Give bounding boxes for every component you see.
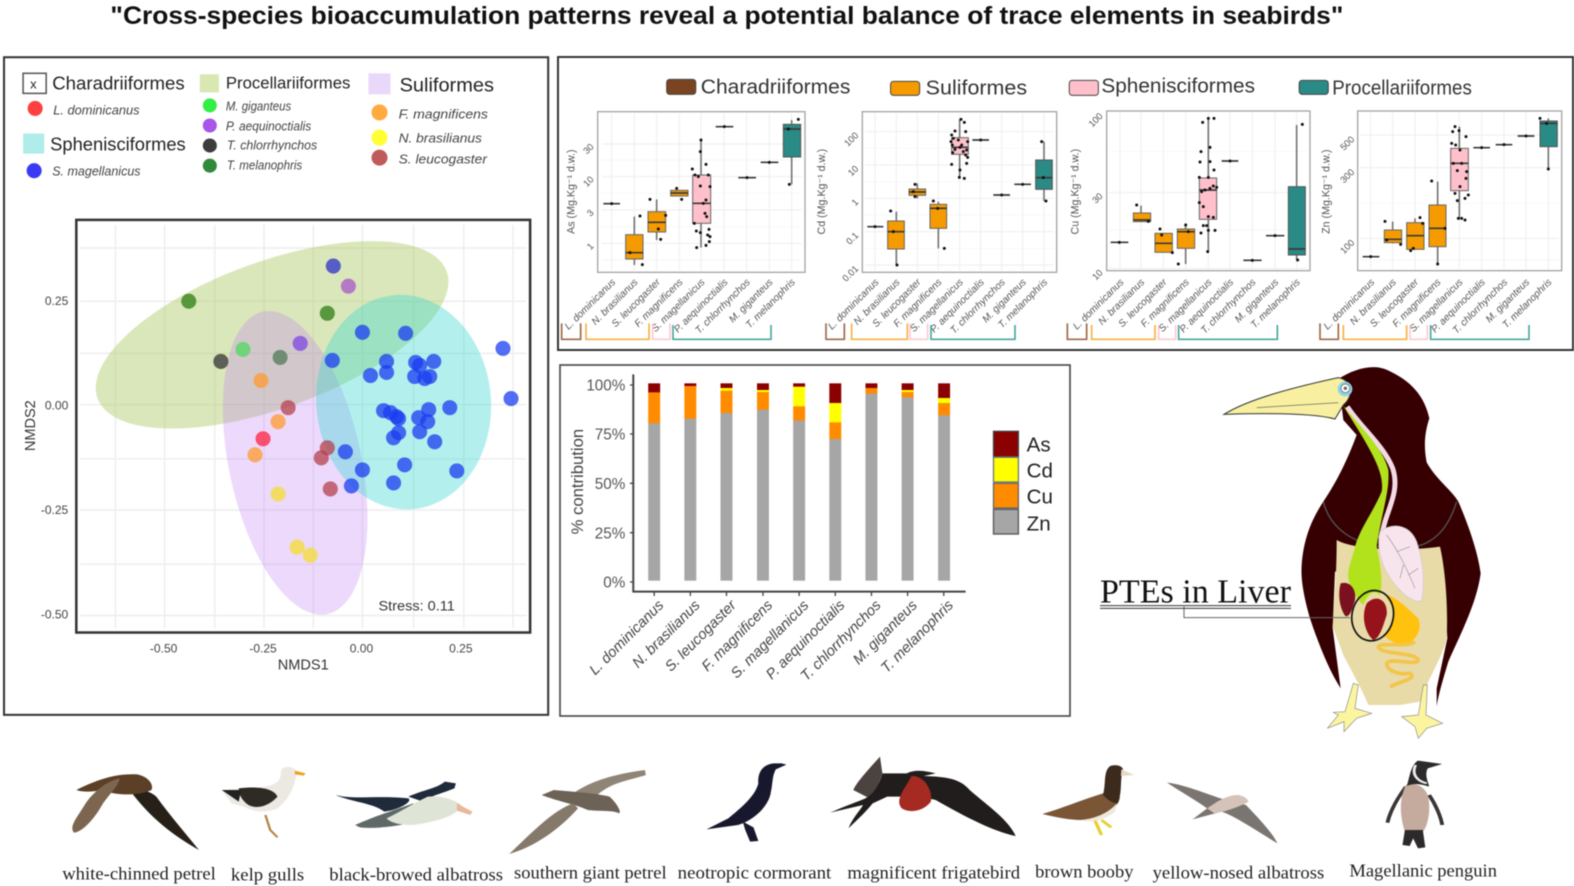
chart: As boxplot: P. aequinoctialis bbox=[672, 277, 730, 335]
bird: white-chinned petrel bbox=[72, 774, 199, 850]
stress label: Stress: 0.11 bbox=[379, 597, 455, 613]
chart: Cu boxplot: L. dominicanus bbox=[1071, 277, 1126, 332]
title: "Cross-species bioaccumulation patterns reveal a potential balance of trace elements in seabirds" bbox=[110, 2, 1343, 30]
chart: Cd boxplot: 10 bbox=[846, 164, 860, 178]
chart: Zn boxplot: S. magellanicus bbox=[1408, 277, 1465, 335]
legend: taxonomic orders and species: M. giganteus bbox=[226, 99, 292, 113]
legend: taxonomic orders and species: Charadriiformes bbox=[52, 73, 185, 93]
stacked bars % contribution: S. leucogaster bbox=[662, 597, 740, 675]
chart: Cd boxplot: P. aequinoctialis bbox=[929, 277, 987, 335]
x axis ticks: 0.00 bbox=[350, 642, 373, 656]
legend: elements: Cd bbox=[1027, 460, 1053, 483]
chart: Cd boxplot: 1 bbox=[850, 197, 860, 208]
chart: Zn boxplot: N. brasilianus bbox=[1348, 277, 1399, 328]
chart: Cu boxplot: N. brasilianus bbox=[1097, 277, 1147, 328]
panel: stacked bar chart bbox=[560, 365, 1070, 716]
chart: As boxplot: N. brasilianus bbox=[590, 277, 640, 328]
gizzard bbox=[1383, 594, 1420, 645]
x axis ticks: -0.50 bbox=[150, 642, 178, 656]
chart: Cu boxplot: F. magnificens bbox=[1139, 277, 1192, 330]
chart: Cu boxplot: Cu (Mg.Kg⁻¹ d.w.) bbox=[1069, 149, 1081, 234]
x axis title: NMDS1 bbox=[278, 658, 329, 674]
y axis ticks bbox=[41, 294, 69, 621]
stacked bars % contribution: % contribution bbox=[568, 429, 587, 534]
chart: Cd boxplot: L. dominicanus bbox=[826, 277, 881, 332]
chart: Cu boxplot: 10 bbox=[1090, 268, 1105, 282]
chart: As boxplot: 10 bbox=[581, 174, 596, 189]
y axis title: NMDS2 bbox=[23, 400, 39, 451]
legend: taxonomic orders and species: P. aequinoctialis bbox=[226, 120, 312, 134]
chart: As boxplot: 30 bbox=[581, 142, 596, 156]
chart: As boxplot: T. chlorrhynchos bbox=[693, 277, 753, 336]
chart: Zn boxplot: L. dominicanus bbox=[1322, 277, 1377, 332]
trachea bbox=[1347, 407, 1395, 538]
stacked bars % contribution: 75% bbox=[595, 427, 626, 444]
feet bbox=[1327, 683, 1443, 738]
chart: Zn boxplot: M. giganteus bbox=[1484, 277, 1532, 325]
legend: taxonomic orders and species: N. brasilianus bbox=[399, 132, 483, 146]
chart: As boxplot: S. magellanicus bbox=[650, 277, 707, 335]
chart: Cu boxplot: T. melanophris bbox=[1249, 277, 1303, 331]
y axis ticks: 0.25 bbox=[45, 294, 69, 308]
bird captions: southern giant petrel bbox=[514, 862, 667, 882]
chart: As boxplot: L. dominicanus bbox=[563, 277, 618, 332]
stacked bars % contribution: P. aequinoctialis bbox=[763, 597, 849, 683]
chart: As boxplot: S. leucogaster bbox=[610, 277, 663, 330]
legend: taxonomic orders and species: Sphenisciformes bbox=[50, 135, 186, 155]
stacked bars % contribution: N. brasilianus bbox=[630, 597, 704, 672]
stacked bars % contribution: M. giganteus bbox=[850, 597, 921, 668]
chart: As boxplot: As (Mg.Kg⁻¹ d.w.) bbox=[565, 149, 577, 234]
label: PTEs in Liver: PTEs in Liver bbox=[1100, 574, 1291, 611]
legend: taxonomic orders and species bbox=[23, 73, 494, 179]
stacked bars % contribution: S. magellanicus bbox=[728, 597, 813, 682]
intestine bbox=[1378, 642, 1418, 687]
bird: brown booby bbox=[1042, 765, 1134, 835]
chart: As boxplot: F. magnificens bbox=[633, 277, 685, 330]
stacked bars % contribution: F. magnificens bbox=[699, 597, 777, 675]
y axis ticks: -0.25 bbox=[41, 503, 69, 517]
chart: Zn boxplot: 500 bbox=[1338, 134, 1356, 152]
bird: southern giant petrel bbox=[509, 770, 646, 854]
stacked bars % contribution: 25% bbox=[595, 525, 626, 542]
chart: Cd boxplot: T. melanophris bbox=[996, 277, 1050, 331]
bird captions: kelp gulls bbox=[231, 865, 304, 885]
chart: As boxplot: 1 bbox=[585, 241, 596, 252]
chart: Zn boxplot: F. magnificens bbox=[1391, 277, 1443, 330]
chart: Cd boxplot: M. giganteus bbox=[981, 277, 1029, 325]
bird captions: magnificent frigatebird bbox=[847, 862, 1020, 882]
legend: taxonomic orders and species: F. magnificens bbox=[399, 107, 489, 121]
bird images row, right bbox=[830, 757, 1442, 848]
chart: Zn boxplot: S. leucogaster bbox=[1368, 277, 1422, 330]
chart: Cu boxplot: P. aequinoctialis bbox=[1178, 277, 1236, 335]
chart: Zn boxplot: T. melanophris bbox=[1501, 277, 1554, 331]
data points bbox=[181, 259, 519, 563]
stacked bars % contribution: T. melanophris bbox=[878, 597, 957, 676]
boxplot legend: Suliformes bbox=[926, 77, 1027, 99]
chart: Zn boxplot: 100 bbox=[1338, 238, 1356, 256]
stacked bars % contribution: T. chlorrhynchos bbox=[798, 597, 885, 685]
chart: Zn boxplot bbox=[1320, 111, 1562, 339]
chart: Cd boxplot: 0.01 bbox=[841, 264, 860, 284]
stacked bars % contribution: 50% bbox=[595, 476, 626, 493]
bird: black-browed albatross bbox=[336, 782, 472, 828]
chart: Cd boxplot: S. magellanicus bbox=[908, 277, 966, 335]
chart: Cu boxplot: 30 bbox=[1090, 191, 1105, 205]
chart: Cu boxplot: S. magellanicus bbox=[1157, 277, 1214, 335]
bird captions: neotropic cormorant bbox=[678, 862, 831, 882]
body silhouette bbox=[1301, 367, 1481, 707]
chart: Cd boxplot: S. leucogaster bbox=[871, 277, 924, 330]
ellipse: Sphenisciformes bbox=[307, 287, 500, 517]
beak bbox=[1224, 378, 1350, 419]
chart: Cd boxplot: F. magnificens bbox=[892, 277, 944, 330]
chart: Cu boxplot: 100 bbox=[1087, 111, 1105, 129]
legend: taxonomic orders and species: T. melanophris bbox=[227, 159, 303, 173]
chart: Cu boxplot: T. chlorrhynchos bbox=[1199, 277, 1258, 336]
legend: taxonomic orders and species: Procellariiformes bbox=[226, 73, 350, 92]
stacked bars % contribution: L. dominicanus bbox=[587, 597, 668, 679]
x axis ticks bbox=[150, 642, 473, 656]
chart: As boxplot bbox=[562, 112, 805, 339]
bird captions: Magellanic penguin bbox=[1349, 860, 1497, 880]
bird: magnificent frigatebird bbox=[830, 757, 1016, 836]
bird captions: white-chinned petrel bbox=[62, 864, 216, 884]
stacked bars % contribution bbox=[568, 374, 1053, 685]
NMDS scatter plot bbox=[23, 202, 530, 674]
chart: As boxplot: 3 bbox=[585, 208, 596, 218]
chart: Zn boxplot: Zn (Mg.Kg⁻¹ d.w.) bbox=[1320, 149, 1332, 234]
chart: Cd boxplot: N. brasilianus bbox=[852, 277, 902, 328]
chart: As boxplot: M. giganteus bbox=[727, 277, 775, 325]
liver bbox=[1339, 583, 1398, 645]
legend: taxonomic orders and species: S. leucogaster bbox=[399, 153, 488, 167]
chart: Cd boxplot bbox=[816, 112, 1057, 339]
panel: boxplots bbox=[558, 57, 1573, 350]
boxplot legend bbox=[667, 75, 1472, 99]
legend: taxonomic orders and species: Suliformes bbox=[400, 74, 494, 96]
chart: Zn boxplot: P. aequinoctialis bbox=[1430, 277, 1488, 335]
leader line bbox=[1184, 607, 1350, 618]
belly bbox=[1333, 540, 1447, 705]
chart: Cd boxplot: Cd (Mg.Kg⁻¹ d.w.) bbox=[816, 149, 828, 234]
legend: taxonomic orders and species: S. magellanicus bbox=[52, 165, 141, 179]
illustration: seabird anatomy with liver highlighted bbox=[1100, 367, 1481, 738]
panel: NMDS ordination bbox=[4, 57, 548, 715]
chart: Zn boxplot: T. chlorrhynchos bbox=[1451, 277, 1510, 336]
ellipse: Procellariiformes bbox=[72, 202, 472, 467]
bird: neotropic cormorant bbox=[706, 763, 786, 842]
legend: elements: Cu bbox=[1027, 486, 1053, 509]
ellipse: Suliformes bbox=[198, 298, 392, 628]
bird captions: yellow-nosed albatross bbox=[1153, 862, 1324, 882]
oesophagus and stomach bbox=[1343, 405, 1389, 605]
x axis ticks: 0.25 bbox=[449, 642, 473, 656]
x axis ticks: -0.25 bbox=[249, 642, 277, 656]
lung bbox=[1379, 526, 1423, 601]
legend: taxonomic orders and species: x bbox=[30, 76, 37, 91]
stacked bars % contribution: 100% bbox=[586, 378, 626, 395]
bird: yellow-nosed albatross bbox=[1167, 783, 1277, 843]
chart: As boxplot: T. melanophris bbox=[744, 277, 798, 331]
bird: Magellanic penguin bbox=[1387, 761, 1442, 848]
boxplot legend: Procellariiformes bbox=[1332, 77, 1472, 99]
chart: Cd boxplot: 0.1 bbox=[844, 230, 860, 247]
chart: Cu boxplot: M. giganteus bbox=[1233, 277, 1281, 325]
y axis ticks: -0.50 bbox=[41, 607, 69, 621]
chart: Cd boxplot: 100 bbox=[842, 130, 860, 148]
bird captions: brown booby bbox=[1035, 861, 1134, 881]
bird: kelp gull bbox=[222, 767, 306, 837]
stacked bars % contribution: 0% bbox=[603, 575, 626, 592]
bird images row, left bbox=[72, 763, 786, 854]
legend: elements: As bbox=[1027, 434, 1051, 457]
chart: Zn boxplot: 300 bbox=[1338, 167, 1356, 185]
chart: Cd boxplot: T. chlorrhynchos bbox=[948, 277, 1008, 336]
legend: taxonomic orders and species: L. dominicanus bbox=[53, 103, 140, 117]
chart: Cu boxplot bbox=[1067, 111, 1310, 339]
y axis ticks: 0.00 bbox=[45, 399, 69, 413]
eye bbox=[1338, 382, 1352, 396]
bird captions: black-browed albatross bbox=[329, 865, 503, 885]
bird captions bbox=[62, 860, 1497, 885]
boxplot legend: Sphenisciformes bbox=[1101, 75, 1255, 97]
legend: taxonomic orders and species: T. chlorrhynchos bbox=[227, 139, 318, 153]
chart: Cu boxplot: S. leucogaster bbox=[1117, 277, 1170, 330]
legend: elements: Zn bbox=[1027, 512, 1051, 535]
boxplot legend: Charadriiformes bbox=[701, 76, 850, 98]
legend: elements bbox=[994, 431, 1053, 535]
